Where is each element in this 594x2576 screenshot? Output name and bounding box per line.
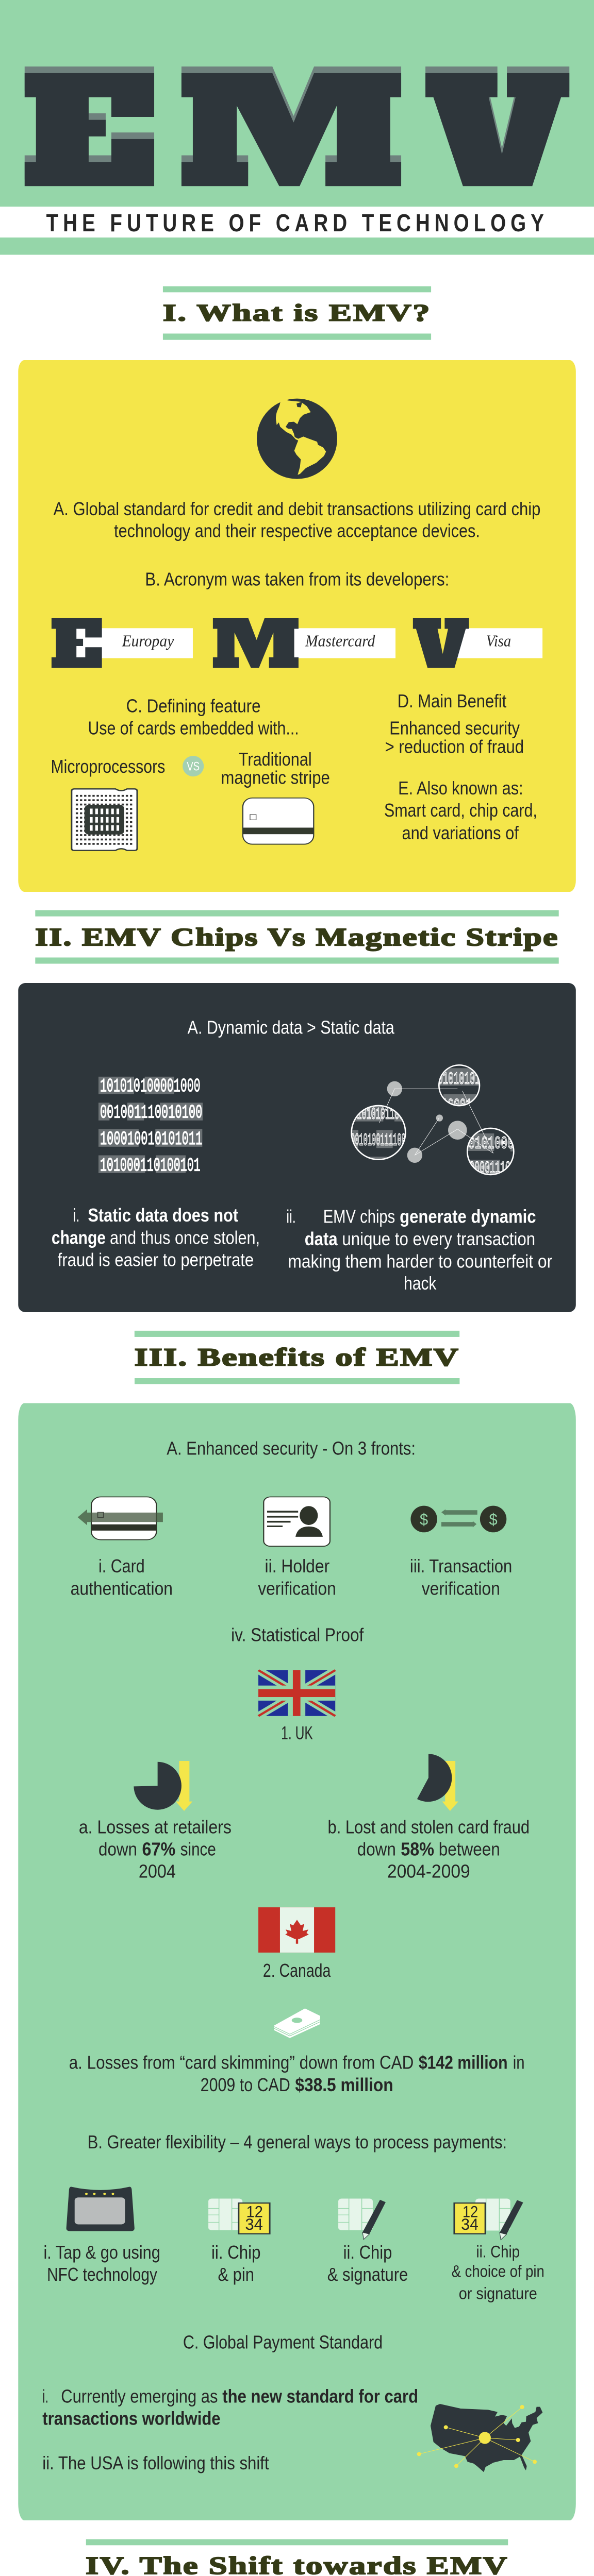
- icon: chip and choice: [454, 2199, 523, 2240]
- text: global payment standard: C. Global Payment Standard: [183, 2332, 383, 2353]
- chart: pie 67%: [134, 1761, 192, 1811]
- text: card skimming losses: in: [513, 2052, 525, 2073]
- text: static data explanation: and thus once stolen,: [110, 1227, 260, 1248]
- label: Canada: 2. Canada: [263, 1960, 331, 1981]
- panel: chips vs stripe: 001001110010100: [100, 1102, 202, 1124]
- title: EMV: [25, 66, 569, 186]
- text: losses at retailers: down: [98, 1839, 137, 1859]
- label: microprocessors: Microprocessors: [51, 756, 165, 777]
- text: losses at retailers: since: [180, 1839, 216, 1859]
- label: card authentication: authentication: [71, 1578, 173, 1599]
- icon: chip and pin: 12: [246, 2202, 263, 2221]
- icon: Canada flag: [258, 1907, 335, 1953]
- text: lost and stolen: [328, 1817, 530, 1882]
- icon: microprocessor chip: [72, 789, 137, 851]
- label: transaction verification: verification: [422, 1578, 500, 1599]
- graphic: dynamic data network: 01010101100: [352, 1106, 404, 1124]
- heading: II. EMV Chips Vs Magnetic Stripe: [35, 910, 559, 964]
- panel: what is EMV: [18, 360, 576, 892]
- icon: chip and choice: 34: [461, 2215, 478, 2233]
- text: also known as E: E. Also known as:: [398, 777, 523, 799]
- label: transaction verification: iii. Transaction: [410, 1555, 512, 1577]
- label: chip and signature: [327, 2242, 408, 2285]
- header banner: [0, 0, 594, 255]
- vs badge: [183, 756, 204, 776]
- text: static data explanation: fraud is easier to perpetrate: [58, 1249, 254, 1270]
- label: holder verification: verification: [258, 1578, 336, 1599]
- text: new standard: [42, 2385, 418, 2429]
- icon: UK flag: [258, 1670, 335, 1716]
- text: static data explanation: Static data does not: [88, 1205, 238, 1226]
- panel: chips vs stripe: 101010100001000: [100, 1076, 201, 1097]
- acronym: V Visa: Visa: [486, 632, 511, 650]
- text: losses at retailers: a. Losses at retailers: [79, 1817, 232, 1837]
- text: main benefit D: > reduction of fraud: [385, 736, 524, 757]
- icon: chip and signature: [338, 2199, 386, 2240]
- text: dynamic data explanation: hack: [404, 1273, 437, 1294]
- graphic: dynamic data network: 0010100111100: [351, 1131, 406, 1151]
- text: defining feature C: C. Defining feature: [126, 695, 260, 716]
- text: lost and stolen: 58%: [401, 1839, 434, 1859]
- acronym: E Europay: Europay: [122, 632, 174, 650]
- text: card skimming losses: 2009 to CAD: [201, 2074, 290, 2095]
- text: enhanced security: A. Enhanced security - On 3 fronts:: [167, 1437, 416, 1459]
- heading: I. What is EMV?: I. What is EMV?: [163, 300, 431, 326]
- text: dynamic data explanation: EMV chips: [323, 1206, 395, 1227]
- icon: chip and pin: [208, 2199, 270, 2234]
- text: dynamic vs static: A. Dynamic data > Static data: [188, 1016, 394, 1038]
- label: chip and choice: ii. Chip: [476, 2243, 520, 2261]
- acronym: M Mastercard: Mastercard: [305, 632, 375, 650]
- label: holder verification: [258, 1555, 336, 1599]
- vs badge: VS: [187, 759, 200, 773]
- text: dynamic data explanation: [286, 1206, 552, 1294]
- text: card skimming losses: a. Losses from “card skimming” down from CAD: [69, 2052, 414, 2073]
- label: magnetic stripe: Traditional: [239, 749, 312, 770]
- icon: transaction verification: $: [489, 1510, 498, 1529]
- icon: holder id card: [263, 1497, 330, 1546]
- text: new standard: i.: [42, 2385, 48, 2406]
- heading: IV. The Shift towards EMV: [85, 2539, 508, 2576]
- label: magnetic stripe: magnetic stripe: [221, 767, 330, 788]
- text: losses at retailers: 2004: [139, 1861, 176, 1882]
- graphic: dynamic data network: 00001110: [469, 1159, 510, 1179]
- text: dynamic data explanation: ii.: [286, 1206, 296, 1227]
- text: new standard: transactions worldwide: [42, 2408, 221, 2429]
- text: definition A: [54, 498, 540, 541]
- panel: chips vs stripe: 101000110100101: [100, 1155, 201, 1177]
- icon: chip and pin: 34: [245, 2215, 263, 2233]
- text: card skimming losses: [69, 2052, 525, 2095]
- text: main benefit D: [385, 690, 524, 757]
- label: chip and pin: ii. Chip: [211, 2242, 260, 2263]
- heading: I. What is EMV?: [163, 286, 431, 340]
- label: card authentication: [71, 1555, 173, 1599]
- icon: card authentication: [78, 1497, 163, 1540]
- icon: NFC terminal: [67, 2187, 135, 2231]
- label: holder verification: ii. Holder: [265, 1555, 329, 1577]
- panel: benefits of EMV: [18, 1403, 576, 2520]
- icon: money stack: [274, 2008, 320, 2038]
- graphic: dynamic data network: [351, 1065, 515, 1179]
- icon: magnetic stripe card: [243, 798, 314, 844]
- graphic: static binary rows: [98, 1076, 203, 1177]
- text: USA following: ii. The USA is following this shift: [42, 2452, 269, 2473]
- label: chip and choice: & choice of pin: [452, 2262, 544, 2281]
- acronym: E Europay: [52, 618, 193, 668]
- text: lost and stolen: 2004-2009: [387, 1861, 470, 1882]
- chart: pie 58%: [417, 1754, 458, 1811]
- text: static data explanation: i.: [73, 1205, 79, 1226]
- text: card skimming losses: $142 million: [419, 2052, 507, 2073]
- text: defining feature C: [88, 695, 299, 738]
- text: statistical proof: iv. Statistical Proof: [231, 1624, 364, 1645]
- label: tap and go: i. Tap & go using: [43, 2242, 160, 2263]
- label: or signature: or signature: [459, 2284, 537, 2303]
- label: chip and pin: [211, 2242, 260, 2285]
- label: card authentication: i. Card: [98, 1555, 145, 1577]
- icon: chip and choice: 12: [463, 2202, 478, 2221]
- text: static data explanation: [52, 1205, 260, 1270]
- text: losses at retailers: 67%: [142, 1839, 175, 1859]
- icon: transaction verification: [410, 1506, 506, 1532]
- icon: transaction verification: $: [420, 1510, 428, 1529]
- label: UK: 1. UK: [281, 1722, 313, 1743]
- label: chip and choice: [452, 2243, 544, 2281]
- text: lost and stolen: between: [439, 1839, 500, 1859]
- text: static data explanation: change: [52, 1227, 106, 1248]
- text: main benefit D: Enhanced security: [389, 717, 520, 738]
- graphic: dynamic data network: 100010: [442, 1096, 478, 1116]
- text: losses at retailers: [79, 1817, 232, 1882]
- acronym: V Visa: [413, 618, 542, 668]
- icon: globe: [257, 398, 337, 479]
- heading: II. EMV Chips Vs Magnetic Stripe: II. EMV Chips Vs Magnetic Stripe: [35, 923, 559, 951]
- label: chip and signature: & signature: [327, 2264, 408, 2285]
- label: magnetic stripe: [221, 749, 330, 788]
- icon: USA network map: [417, 2404, 542, 2472]
- text: lost and stolen: down: [357, 1839, 396, 1859]
- label: tap and go: NFC technology: [47, 2264, 157, 2285]
- text: card skimming losses: $38.5 million: [295, 2074, 393, 2095]
- panel content: [51, 498, 542, 851]
- panel: chips vs stripe: [18, 983, 576, 1312]
- label: transaction verification: [410, 1555, 512, 1599]
- text: main benefit D: D. Main Benefit: [398, 690, 506, 711]
- label: chip and pin: & pin: [218, 2264, 254, 2285]
- heading: III. Benefits of EMV: [135, 1331, 459, 1384]
- text: also known as E: and variations of: [402, 822, 519, 843]
- text: new standard: the new standard for card: [222, 2385, 418, 2406]
- panel: chips vs stripe: 100010010101011: [100, 1129, 202, 1150]
- text: dynamic data explanation: data: [305, 1228, 338, 1249]
- text: new standard: Currently emerging as: [61, 2385, 218, 2406]
- label: chip and signature: ii. Chip: [343, 2242, 392, 2263]
- acronym: M Mastercard: [213, 618, 395, 668]
- graphic: dynamic data network: 0101000: [468, 1134, 514, 1154]
- heading: III. Benefits of EMV: III. Benefits of EMV: [135, 1344, 459, 1371]
- text: defining feature C: Use of cards embedded with...: [88, 717, 299, 738]
- graphic: dynamic data network: 01010101: [437, 1070, 481, 1089]
- text: acronym B: B. Acronym was taken from its developers:: [145, 568, 449, 589]
- text: also known as E: [384, 777, 537, 843]
- label: tap and go: [43, 2242, 160, 2285]
